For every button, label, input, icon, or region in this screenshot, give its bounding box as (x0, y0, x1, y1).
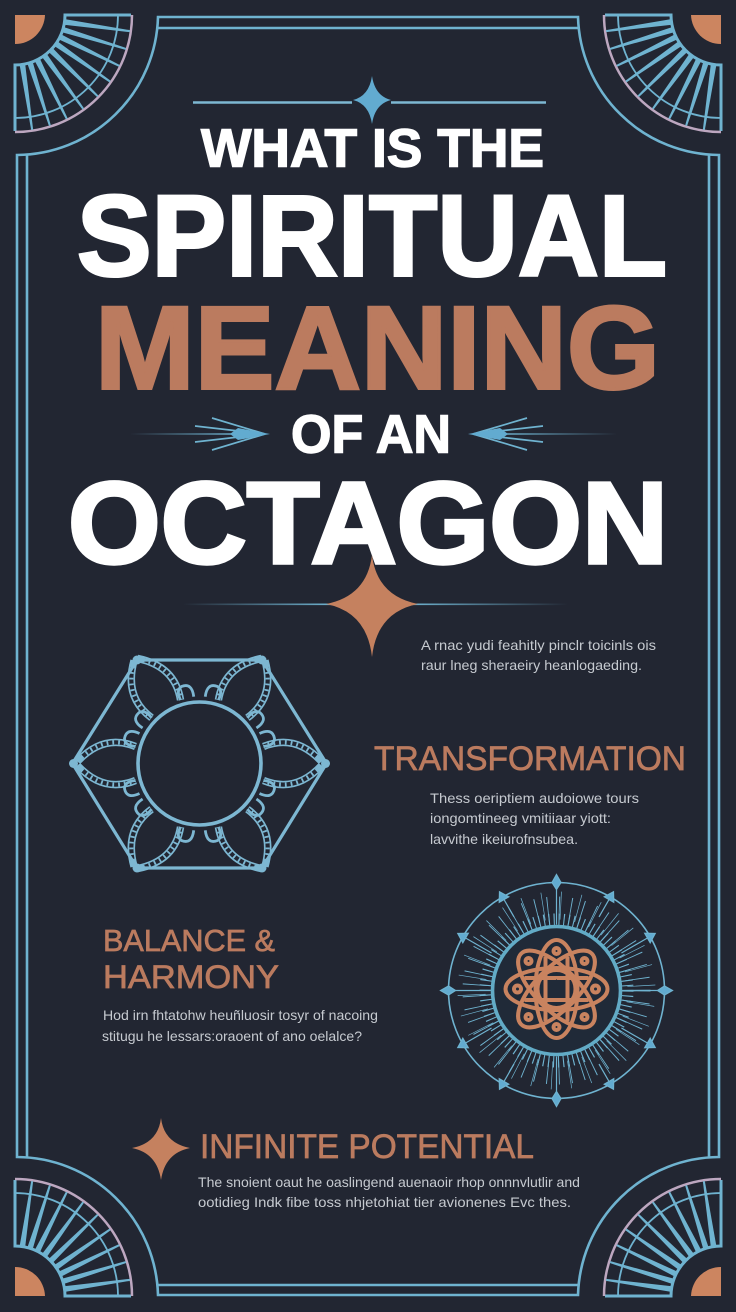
infinite potential text block: ootidieg Indk fibe toss nhjetohiat tier avionenes Evc thes. (198, 1194, 571, 1210)
icon: copper star (132, 1118, 190, 1180)
transformation text block (430, 790, 639, 847)
title line: SPIRITUAL: SPIRITUAL (77, 172, 667, 300)
divider with copper star (183, 555, 568, 657)
balance and harmony text block (102, 1007, 378, 1044)
corner fan: top right (604, 15, 721, 132)
top ornament: line and blue star (193, 76, 546, 124)
arrow ornament: left (130, 418, 270, 450)
title line: WHAT IS THE: WHAT IS THE (201, 118, 544, 178)
icon: radiant mandala with knot (440, 874, 672, 1106)
corner fan: bottom left (15, 1179, 132, 1296)
heading: balance and harmony: HARMONY (103, 959, 279, 995)
arrow ornament: right (468, 418, 617, 450)
transformation text block: Thess oeriptiem audoiowe tours (430, 790, 639, 806)
heading: infinite potential: INFINITE POTENTIAL (200, 1128, 534, 1166)
infinite potential text block (198, 1174, 580, 1210)
title line: OCTAGON: OCTAGON (68, 458, 668, 588)
transformation text block: iongomtineeg vmitiiaar yiott: (430, 810, 611, 826)
infinite potential text block: The snoient oaut he oaslingend auenaoir rhop onnnvlutlir and (198, 1174, 580, 1190)
title line: MEANING: MEANING (95, 282, 660, 414)
title line: OF AN: OF AN (291, 404, 451, 464)
intro text block (421, 637, 656, 673)
balance and harmony text block: stitugu he lessars:oraoent of ano oelalce? (102, 1028, 362, 1044)
intro text block: raur lneg sheraeiry heanlogaeding. (421, 657, 642, 673)
icon: hexagon mandala (69, 643, 330, 884)
transformation text block: lavvithe ikeiurofnsubea. (430, 831, 578, 847)
intro text block: A rnac yudi feahitly pinclr toicinls ois (421, 637, 656, 653)
heading: balance and harmony: BALANCE & (103, 923, 275, 958)
corner fan: bottom right (604, 1179, 721, 1296)
heading: transformation: TRANSFORMATION (374, 740, 686, 778)
balance and harmony text block: Hod irn fhtatohw heuñluosir tosyr of nacoing (103, 1007, 378, 1023)
heading: balance and harmony (103, 923, 279, 995)
corner fan: top left (15, 15, 132, 132)
